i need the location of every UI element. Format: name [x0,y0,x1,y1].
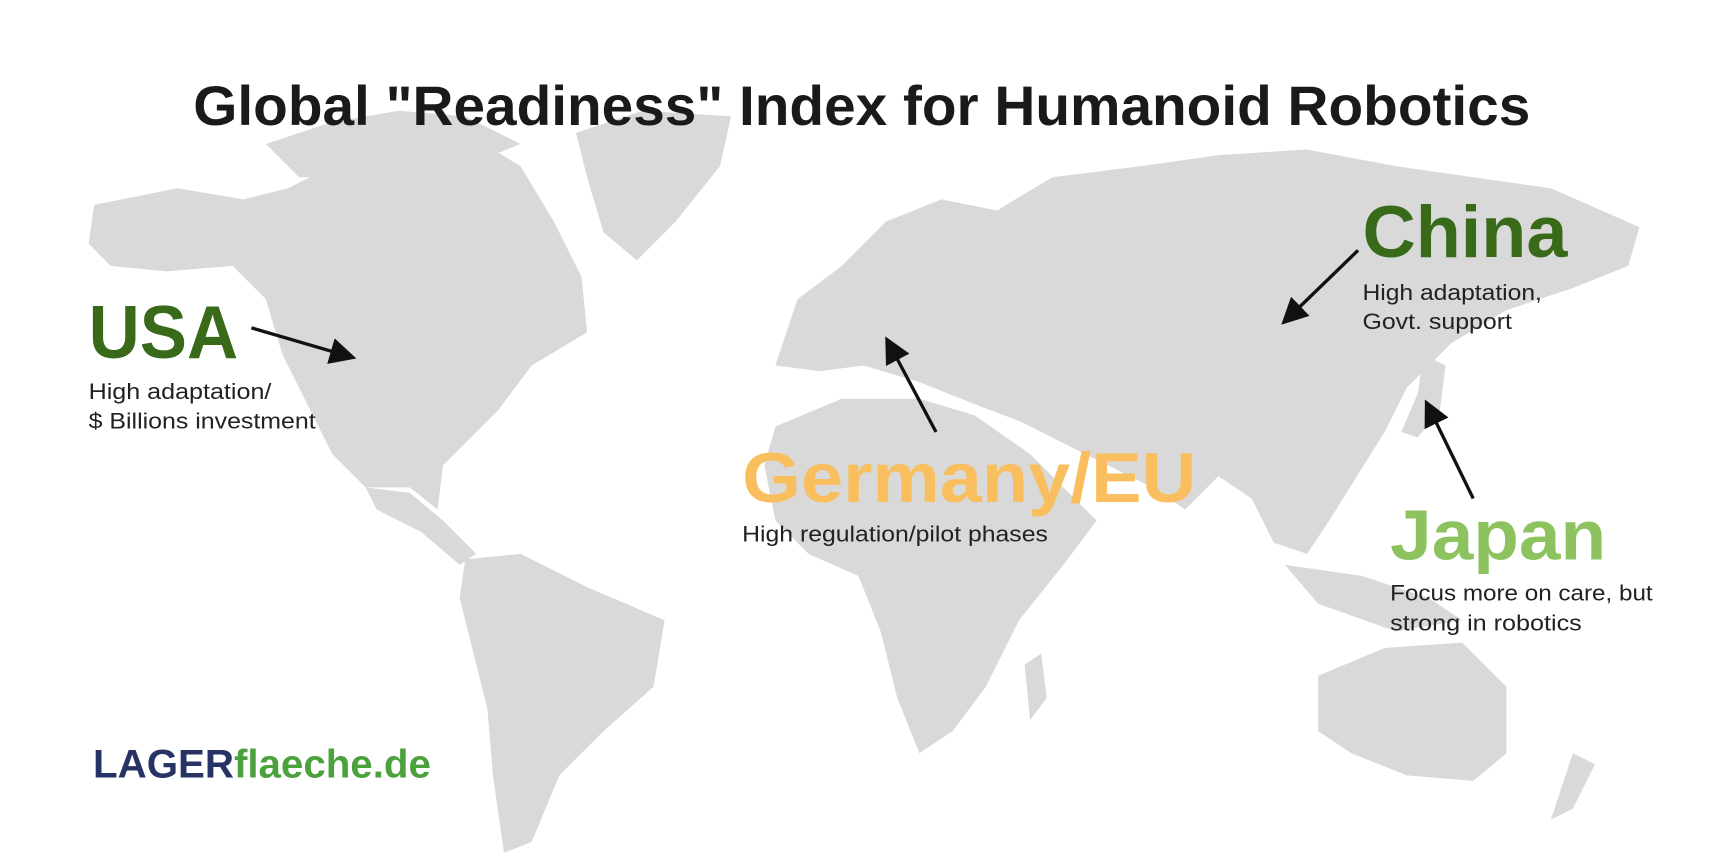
arrow: Japan [1428,405,1473,498]
label: China: High adaptation, [1362,280,1542,305]
label: China [1362,192,1569,334]
label: Japan: Japan [1390,496,1606,575]
label: Japan: Focus more on care, but [1390,580,1653,605]
label: Germany/EU: High regulation/pilot phases [742,522,1048,547]
label: China: Govt. support [1362,309,1512,334]
australia [1318,642,1506,781]
madagascar [1025,654,1047,720]
arctic islands [266,111,521,177]
title: Global "Readiness" Index for Humanoid Robotics [193,75,1530,137]
arrow: China [1286,250,1358,320]
label: USA [89,290,316,434]
arrow: USA [251,328,350,357]
label: USA: USA [89,290,238,374]
label: Germany/EU: Germany/EU [742,439,1196,518]
japan [1401,354,1446,438]
africa [764,399,1097,753]
central america [366,487,476,565]
world map background [89,111,1639,853]
label: Japan: strong in robotics [1390,610,1582,635]
se asia islands [1285,565,1462,631]
new zealand [1551,753,1595,820]
label: USA: $ Billions investment [89,409,316,434]
greenland [576,111,731,260]
eurasia [775,150,1639,554]
label: Japan [1390,496,1653,635]
south america [460,554,665,853]
north america [89,133,587,510]
label: China: China [1362,192,1569,273]
label: Germany/EU [742,439,1196,547]
label: USA: High adaptation/ [89,379,272,404]
arrow: Germany [888,342,936,432]
logo: LAGERflaeche.de [93,743,431,787]
